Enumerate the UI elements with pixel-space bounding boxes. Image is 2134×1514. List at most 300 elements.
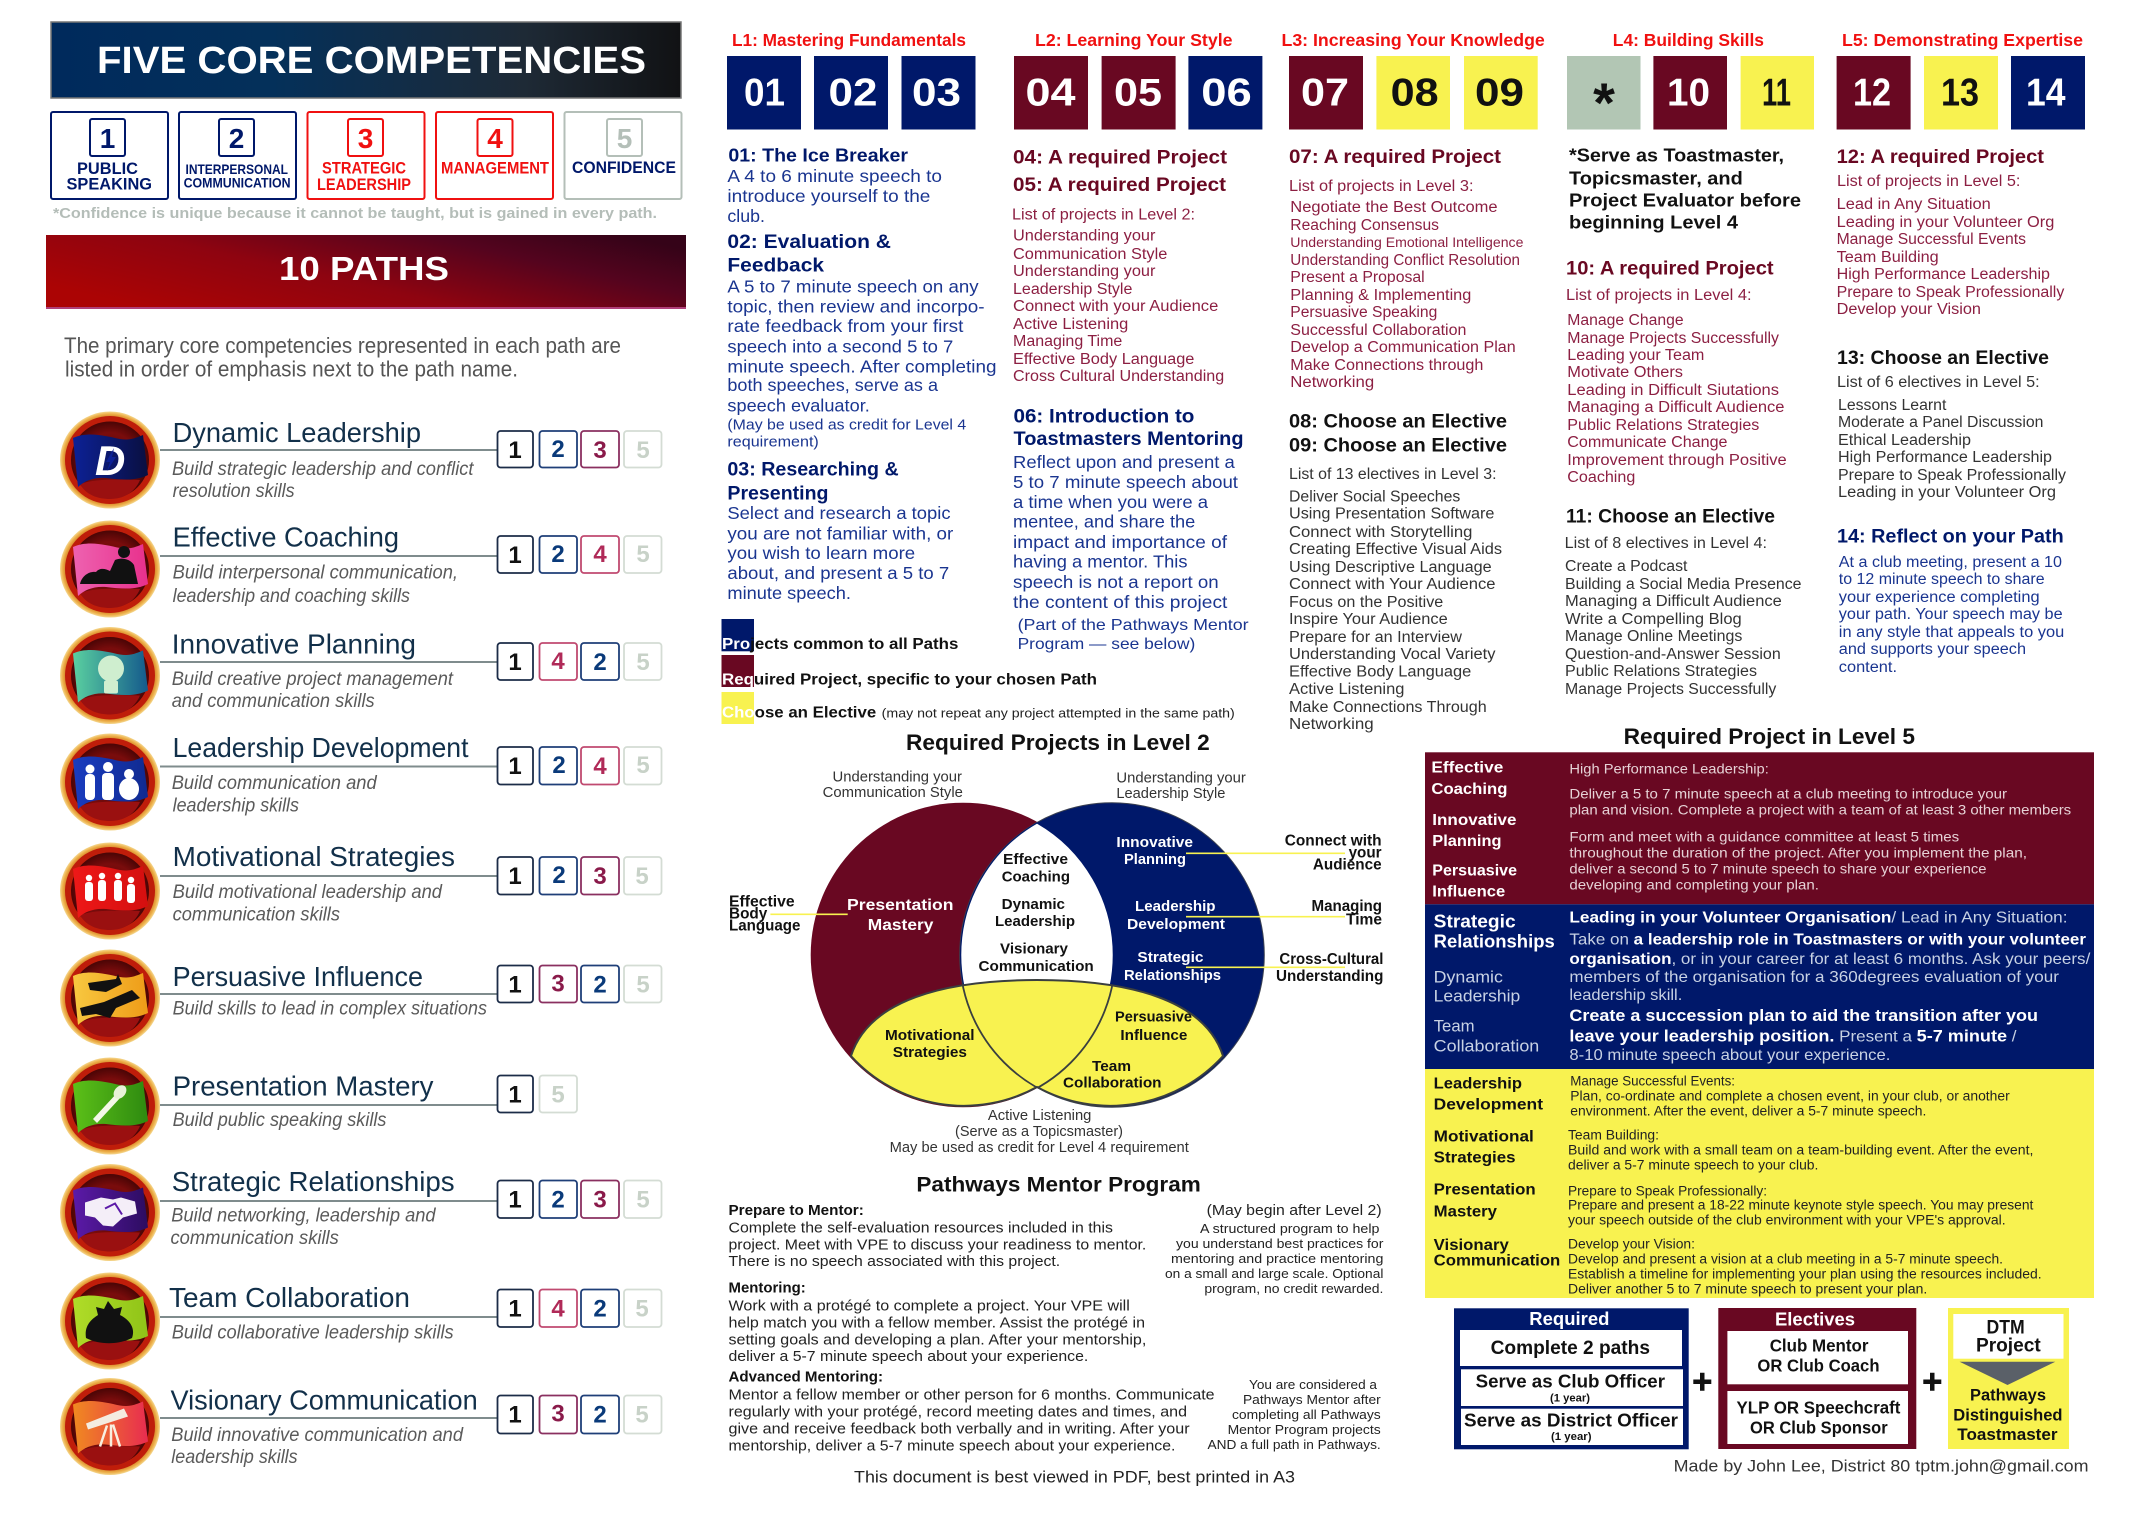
competency badges 1 5: 5 bbox=[551, 1082, 565, 1108]
maroon band: plan and vision. Complete a project with a team of at least 3 other members bbox=[1569, 801, 2071, 817]
venn captions: Active Listening bbox=[988, 1108, 1091, 1124]
text column: level 5 projects: Prepare to Speak Professionally bbox=[1837, 284, 2065, 301]
project number tiles: * bbox=[1593, 71, 1615, 134]
competency badges 1 2 3 5: 1 bbox=[508, 863, 522, 890]
path: Visionary Communication: Build innovative communication and bbox=[171, 1424, 464, 1446]
mentor note: considered a pathways mentor: completing all Pathways bbox=[1232, 1407, 1381, 1422]
arrow bbox=[1960, 1362, 2055, 1385]
text column: level 3 projects: Present a Proposal bbox=[1290, 269, 1425, 286]
card 4 management: MANAGEMENT bbox=[441, 158, 550, 178]
text column: level 2 projects: Connect with your Audience bbox=[1013, 298, 1218, 315]
venn labels: Understanding bbox=[1276, 968, 1383, 985]
competency badges 1 2 3 5: 1 bbox=[508, 1186, 522, 1214]
yellow band: Motivational bbox=[1434, 1129, 1534, 1146]
text column: level 2 projects: speech is not a report on bbox=[1013, 572, 1219, 592]
text column: level 5 projects: At a club meeting, present a 10 bbox=[1839, 554, 2062, 571]
mentor note: considered a pathways mentor: You are considered a bbox=[1249, 1377, 1378, 1392]
icon: dynamic leadership medal: D bbox=[95, 437, 125, 484]
path: Motivational Strategies bbox=[60, 841, 662, 940]
text column: level 4 projects: Coaching bbox=[1567, 469, 1635, 486]
text column: level 3 projects: Make Connections through bbox=[1290, 357, 1483, 374]
navy band: Leadership bbox=[1434, 986, 1520, 1005]
path: Team Collaboration bbox=[60, 1272, 662, 1370]
path: Visionary Communication: leadership skills bbox=[171, 1446, 298, 1468]
text column: level 2 projects: List of projects in Level 2: bbox=[1012, 206, 1195, 223]
path: Strategic Relationships: communication skills bbox=[170, 1227, 339, 1249]
mentor note: may begin after level 2: mentoring and practice mentoring bbox=[1171, 1251, 1383, 1266]
text column: level 2 projects: Effective Body Language bbox=[1013, 351, 1194, 368]
text column: level 1 projects bbox=[727, 144, 996, 603]
text column: level 3 projects: Inspire Your Audience bbox=[1289, 611, 1448, 628]
path: Innovative Planning: Innovative Planning bbox=[172, 629, 416, 660]
mentor note: may begin after level 2: you understand best practices for bbox=[1176, 1236, 1384, 1251]
text column: level 5 projects: Leading in your Volunteer Org bbox=[1837, 214, 2054, 231]
box: electives: YLP OR Speechcraft bbox=[1736, 1397, 1901, 1417]
maroon band: developing and completing your plan. bbox=[1569, 876, 1819, 892]
text column: level 1 projects: about, and present a 5 to 7 bbox=[727, 563, 949, 583]
text column: level 2 projects bbox=[1012, 147, 1249, 653]
venn labels: Relationships bbox=[1124, 967, 1221, 984]
text column: level 1 projects: Feedback bbox=[727, 254, 824, 276]
text column: level 2 projects: Managing Time bbox=[1013, 333, 1122, 350]
project number tiles: 06 bbox=[1201, 72, 1252, 114]
text column: level 2 projects: Program — see below) bbox=[1018, 636, 1195, 653]
box: DTM project bbox=[1948, 1308, 2069, 1449]
title banner: five core competencies bbox=[51, 22, 681, 98]
card 2 interpersonal communication: COMMUNICATION bbox=[184, 174, 291, 190]
text column: level 3 projects: Understanding Conflict Resolution bbox=[1290, 252, 1520, 269]
competency badges 1 2 4 5: 2 bbox=[552, 752, 566, 779]
venn labels: Visionary bbox=[1000, 940, 1069, 957]
competency badges 1 3 2 5: 2 bbox=[593, 1402, 607, 1428]
mentor note: may begin after level 2: on a small and large scale. Optional bbox=[1165, 1266, 1384, 1281]
competency badges 1 2 4 5: 5 bbox=[636, 541, 650, 568]
navy band: members of the organisation for a 360degrees evaluation of your bbox=[1569, 969, 2060, 986]
text column: level 4 projects: Manage Projects Successfully bbox=[1567, 330, 1779, 347]
venn labels: Strategic bbox=[1137, 949, 1204, 966]
navy band: Collaboration bbox=[1434, 1036, 1539, 1055]
competency badges 1 3 2 5: 1 bbox=[508, 972, 522, 998]
box: electives: Electives bbox=[1775, 1310, 1855, 1330]
box: required: (1 year) bbox=[1551, 1431, 1592, 1443]
text column: level 3 projects: List of projects in Level 3: bbox=[1289, 178, 1474, 195]
text column: level 1 projects: (May be used as credit for Level 4 bbox=[727, 417, 966, 433]
box: required: (1 year) bbox=[1550, 1393, 1590, 1405]
text column: level 5 projects: 13: Choose an Elective bbox=[1837, 348, 2049, 369]
text column: level 2 projects: Cross Cultural Understanding bbox=[1013, 368, 1224, 385]
venn labels: Motivational bbox=[885, 1027, 974, 1044]
text column: level 5 projects bbox=[1837, 147, 2066, 676]
competency badges 1 2 3 5 bbox=[498, 857, 662, 894]
venn labels: Innovative bbox=[1116, 834, 1193, 851]
project number tiles: 09 bbox=[1475, 72, 1524, 114]
icon: leadership development medal bbox=[60, 734, 160, 830]
prepare to mentor: There is no speech associated with this project. bbox=[728, 1253, 1060, 1270]
competency badges 1 3 2 5: 3 bbox=[551, 970, 565, 998]
prepare to mentor: Complete the self-evaluation resources included in this bbox=[728, 1219, 1113, 1236]
viewing note: This document is best viewed in PDF, best printed in A3 bbox=[854, 1468, 1295, 1487]
path: Persuasive Influence bbox=[60, 950, 662, 1046]
text column: level 1 projects: speech into a second 5 to 7 bbox=[727, 336, 953, 356]
navy band: leave your leadership position. Present a 5-7 minute / bbox=[1569, 1027, 2017, 1046]
text column: level 5 projects: Leading in your Volunteer Org bbox=[1838, 484, 2056, 501]
mentor note: may begin after level 2: A structured program to help bbox=[1200, 1221, 1379, 1236]
maroon band bbox=[1425, 752, 2094, 904]
connector lines bbox=[770, 853, 1345, 967]
text column: level 4 projects: Create a Podcast bbox=[1565, 558, 1688, 575]
yellow band: Team Building: bbox=[1568, 1127, 1659, 1142]
text column: level 5 projects: Lead in Any Situation bbox=[1837, 196, 1991, 213]
text column: level 4 projects: Project Evaluator before bbox=[1569, 190, 1801, 211]
text column: level 5 projects: Ethical Leadership bbox=[1838, 432, 1971, 449]
competency badges 1 2 3 5 bbox=[498, 1180, 662, 1218]
icon: effective coaching medal bbox=[60, 520, 160, 618]
mentoring: deliver a 5-7 minute speech about your experience. bbox=[728, 1348, 1088, 1365]
box: required: Complete 2 paths bbox=[1491, 1338, 1650, 1359]
competency badges 1 3 2 5: 3 bbox=[551, 1400, 565, 1428]
heading: Required Projects in Level 2 bbox=[906, 730, 1210, 755]
competency badges 1 2 3 5: 2 bbox=[551, 436, 565, 463]
competency badges 1 4 2 5: 4 bbox=[551, 1296, 565, 1322]
path: Effective Coaching: Build interpersonal communication, bbox=[173, 562, 458, 584]
competency badges 1 5: 1 bbox=[508, 1082, 522, 1108]
text column: level 3 projects: Effective Body Language bbox=[1289, 664, 1471, 681]
competency badges 1 2 3 5: 5 bbox=[635, 863, 649, 890]
competency badges 1 3 2 5: 1 bbox=[508, 1402, 522, 1428]
text column: level 4 projects: Managing a Difficult Audience bbox=[1565, 593, 1782, 610]
competency badges 1 4 2 5: 5 bbox=[635, 1296, 649, 1322]
maroon band: Influence bbox=[1432, 884, 1505, 901]
text column: level 5 projects: your path. Your speech may be bbox=[1839, 606, 2063, 623]
text column: level 1 projects: minute speech. After completing bbox=[727, 356, 996, 376]
competency badges 1 2 4 5: 1 bbox=[508, 542, 522, 569]
text column: level 5 projects: List of projects in Level 5: bbox=[1837, 173, 2020, 190]
venn labels: Dynamic bbox=[1002, 896, 1065, 913]
path: Effective Coaching: leadership and coaching skills bbox=[173, 585, 410, 607]
venn captions: May be used as credit for Level 4 requirement bbox=[890, 1140, 1189, 1156]
colour legend: Choose an Elective bbox=[722, 704, 876, 721]
text column: level 4 projects: Building a Social Media Presence bbox=[1565, 576, 1802, 593]
navy band: Leading in your Volunteer Organisation / Lead in Any Situation: bbox=[1569, 910, 2068, 927]
path: Effective Coaching: Effective Coaching bbox=[173, 521, 399, 552]
navy band bbox=[1425, 904, 2094, 1069]
text column: level 3 projects: Deliver Social Speeches bbox=[1289, 489, 1461, 506]
path: Strategic Relationships: Build networking, leadership and bbox=[171, 1205, 437, 1227]
box: electives: Club Mentor bbox=[1770, 1336, 1869, 1356]
project number tiles bbox=[727, 56, 2085, 134]
mentor note: considered a pathways mentor: Pathways Mentor after bbox=[1243, 1392, 1381, 1407]
icon: persuasive influence medal bbox=[60, 950, 160, 1046]
card 5 confidence: CONFIDENCE bbox=[572, 158, 676, 177]
text column: level 2 projects: Reflect upon and present a bbox=[1013, 452, 1235, 472]
text column: level 2 projects: 04: A required Project bbox=[1013, 147, 1228, 168]
project number tiles: 08 bbox=[1391, 72, 1439, 114]
maroon band: Coaching bbox=[1431, 781, 1507, 798]
project number tiles: 12 bbox=[1853, 72, 1891, 114]
path: Dynamic Leadership bbox=[60, 412, 662, 508]
panel: required projects in level 2 venn bbox=[729, 730, 1383, 1156]
competency badges 1 2 4 5: 2 bbox=[551, 541, 565, 568]
mentoring bbox=[728, 1280, 1146, 1365]
project number tiles: 14 bbox=[2026, 72, 2066, 114]
text column: level 3 projects: Networking bbox=[1290, 374, 1374, 391]
text column: level 3 projects: 08: Choose an Elective bbox=[1289, 412, 1507, 433]
competency badges 1 4 2 5: 1 bbox=[508, 649, 522, 676]
text column: level 3 projects bbox=[1289, 147, 1523, 733]
text column: level 4 projects: Manage Online Meetings bbox=[1565, 628, 1743, 645]
text column: level 4 projects: Managing a Difficult Audience bbox=[1567, 399, 1784, 416]
venn labels: Influence bbox=[1120, 1027, 1187, 1044]
text column: level 1 projects: you wish to learn more bbox=[727, 543, 915, 563]
card 1 public speaking: PUBLIC bbox=[77, 159, 138, 178]
text column: level 4 projects: Public Relations Strategies bbox=[1567, 417, 1760, 434]
text column: level 3 projects: Understanding Vocal Variety bbox=[1289, 646, 1496, 663]
paths intro text: listed in order of emphasis next to the path name. bbox=[65, 356, 518, 382]
yellow band: Leadership bbox=[1434, 1075, 1522, 1092]
colour legend: (may not repeat any project attempted in the same path) bbox=[882, 706, 1235, 720]
banner: 10 paths bbox=[46, 235, 686, 309]
text column: level 1 projects: A 4 to 6 minute speech to bbox=[727, 166, 942, 186]
venn labels: Planning bbox=[1124, 851, 1186, 868]
navy band: organisation , or in your career for at least 6 months. Ask your peers/ bbox=[1569, 951, 2091, 968]
icon: plus bbox=[1923, 1373, 1941, 1391]
card 2 interpersonal communication bbox=[179, 112, 296, 199]
venn labels: Team bbox=[1092, 1058, 1131, 1075]
panel: required project in level 5 bbox=[1425, 724, 2094, 1298]
mentor note: considered a pathways mentor bbox=[1208, 1377, 1381, 1452]
title banner: five core competencies: FIVE CORE COMPETENCIES bbox=[97, 40, 646, 82]
project number tiles: 03 bbox=[912, 72, 961, 114]
text column: level 4 projects bbox=[1565, 144, 1802, 698]
competency badges 1 2 4 5: 4 bbox=[593, 753, 607, 780]
text column: level 3 projects: Networking bbox=[1289, 716, 1374, 733]
venn labels: Communication bbox=[978, 958, 1094, 975]
venn captions bbox=[823, 770, 1246, 1156]
text column: level 4 projects: 10: A required Project bbox=[1566, 259, 1774, 280]
path: Persuasive Influence: Persuasive Influence bbox=[173, 961, 423, 992]
text column: level 5 projects: in any style that appeals to you bbox=[1839, 624, 2064, 641]
venn captions: Communication Style bbox=[823, 785, 963, 801]
venn labels bbox=[729, 833, 1383, 1092]
text column: level 5 projects: 14: Reflect on your Path bbox=[1837, 527, 2064, 548]
competency badges 1 4 2 5: 2 bbox=[593, 1296, 607, 1322]
competency badges 1 2 3 5: 5 bbox=[636, 1186, 650, 1214]
path: Team Collaboration: Build collaborative leadership skills bbox=[172, 1322, 454, 1344]
maroon band: Form and meet with a guidance committee at least 5 times bbox=[1569, 828, 1959, 844]
icon: presentation mastery medal bbox=[60, 1058, 160, 1154]
text column: level 4 projects: Manage Change bbox=[1567, 312, 1684, 329]
text column: level 3 projects: 07: A required Project bbox=[1289, 147, 1502, 168]
text column: level 3 projects: Prepare for an Interview bbox=[1289, 629, 1463, 646]
box: DTM project: Distinguished bbox=[1953, 1407, 2062, 1425]
competency badges 1 2 4 5: 1 bbox=[508, 753, 522, 780]
venn captions: (Serve as a Topicsmaster) bbox=[955, 1124, 1123, 1140]
navy band: 8-10 minute speech about your experience. bbox=[1569, 1047, 1890, 1064]
text column: level 4 projects: Manage Projects Successfully bbox=[1565, 681, 1777, 698]
yellow band: Establish a timeline for implementing your plan using the resources included. bbox=[1568, 1267, 2042, 1282]
yellow band: deliver a 5-7 minute speech to your club. bbox=[1568, 1157, 1818, 1172]
text column: level 5 projects: Team Building bbox=[1837, 249, 1939, 266]
text column: level 2 projects: Active Listening bbox=[1013, 316, 1128, 333]
text column: level 4 projects: Question-and-Answer Session bbox=[1565, 646, 1781, 663]
venn captions: Understanding your bbox=[832, 770, 962, 786]
competency badges 1 2 3 5: 2 bbox=[552, 862, 566, 889]
text column: level 2 projects: Understanding your bbox=[1013, 263, 1155, 280]
text column: level 2 projects: having a mentor. This bbox=[1013, 552, 1188, 572]
text column: level 4 projects: Leading your Team bbox=[1567, 347, 1704, 364]
path: Visionary Communication bbox=[60, 1378, 662, 1475]
box: required: Serve as District Officer bbox=[1464, 1411, 1678, 1431]
colour legend bbox=[722, 619, 1235, 724]
text column: level 3 projects: Using Descriptive Language bbox=[1289, 559, 1492, 576]
competency badges 1 4 2 5 bbox=[498, 1290, 662, 1327]
level headings: L3: Increasing Your Knowledge bbox=[1282, 30, 1545, 50]
venn labels: Collaboration bbox=[1063, 1075, 1162, 1092]
venn labels: Body bbox=[729, 906, 768, 923]
project number tiles: 02 bbox=[828, 72, 878, 114]
competency badges 1 2 3 5 bbox=[498, 431, 662, 468]
venn labels: Coaching bbox=[1002, 868, 1070, 885]
box: electives: OR Club Sponsor bbox=[1750, 1417, 1888, 1437]
text column: level 3 projects: Successful Collaboration bbox=[1290, 322, 1466, 339]
competency badges 1 3 2 5: 5 bbox=[635, 1402, 649, 1428]
card 1 public speaking: SPEAKING bbox=[66, 174, 152, 194]
competency badges 1 2 3 5: 3 bbox=[593, 863, 607, 890]
path: Presentation Mastery: Presentation Mastery bbox=[173, 1071, 434, 1102]
navy band: leadership skill. bbox=[1569, 987, 1682, 1004]
yellow band: Develop and present a vision at a club meeting in a 5-7 minute speech. bbox=[1568, 1252, 2003, 1267]
competency badges 1 4 2 5: 4 bbox=[551, 648, 565, 675]
text column: level 5 projects: your experience completing bbox=[1839, 589, 2040, 606]
text column: level 3 projects: Negotiate the Best Outcome bbox=[1290, 199, 1498, 216]
mentoring: help match you with a fellow member. Assist the protégé in bbox=[728, 1314, 1145, 1331]
card 5 confidence: 5 bbox=[617, 123, 632, 154]
path: Leadership Development: Leadership Development bbox=[173, 732, 469, 763]
prepare to mentor bbox=[728, 1202, 1146, 1270]
panel: DTM requirements bbox=[1454, 1308, 2069, 1449]
text column: level 1 projects: minute speech. bbox=[727, 583, 851, 603]
venn chart bbox=[729, 803, 1383, 1107]
path: Presentation Mastery bbox=[60, 1058, 577, 1154]
venn labels: Persuasive bbox=[1115, 1009, 1192, 1026]
mentor note: considered a pathways mentor: Mentor Program projects bbox=[1228, 1422, 1381, 1437]
venn labels: Development bbox=[1127, 916, 1225, 933]
level headings: L1: Mastering Fundamentals bbox=[732, 30, 966, 50]
path: Leadership Development bbox=[60, 732, 662, 830]
author credit: Made by John Lee, District 80 tptm.john@gmail.com bbox=[1674, 1457, 2088, 1476]
confidence footnote: *Confidence is unique because it cannot be taught, but is gained in every path. bbox=[53, 206, 657, 222]
card 5 confidence bbox=[564, 112, 682, 199]
text column: level 5 projects: Moderate a Panel Discussion bbox=[1838, 414, 2043, 431]
competency badges 1 3 2 5 bbox=[498, 1396, 662, 1434]
project number tiles: 11 bbox=[1762, 72, 1791, 114]
path: Persuasive Influence: Build skills to lead in complex situations bbox=[173, 998, 487, 1020]
icon: strategic relationships medal bbox=[60, 1164, 160, 1261]
path: Leadership Development: Build communication and bbox=[172, 772, 378, 794]
icon: team collaboration medal bbox=[60, 1272, 160, 1370]
card 1 public speaking: 1 bbox=[100, 123, 115, 154]
heading: Pathways Mentor Program bbox=[916, 1174, 1201, 1197]
box: DTM project: Pathways bbox=[1970, 1387, 2046, 1405]
text column: level 5 projects: Lessons Learnt bbox=[1838, 397, 1947, 414]
project number tiles: 10 bbox=[1667, 72, 1710, 114]
venn labels: your bbox=[1349, 845, 1382, 862]
venn labels: Effective bbox=[729, 894, 795, 911]
path: Motivational Strategies: communication skills bbox=[173, 904, 340, 926]
mentoring: Mentoring: bbox=[728, 1280, 806, 1297]
maroon band: deliver a second 5 to 7 minute speech to share your experience bbox=[1569, 860, 1987, 876]
competency badges 1 2 3 5: 3 bbox=[593, 437, 607, 464]
project number tiles: 05 bbox=[1114, 72, 1162, 114]
competency badges 1 2 4 5: 5 bbox=[636, 752, 650, 779]
yellow band: your speech outside of the club environment with your VPE's approval. bbox=[1568, 1213, 2006, 1228]
competency badges 1 2 4 5 bbox=[498, 747, 662, 784]
text column: level 1 projects: you are not familiar with, or bbox=[727, 523, 953, 543]
text column: level 2 projects: Understanding your bbox=[1013, 228, 1155, 245]
text column: level 2 projects: Communication Style bbox=[1013, 246, 1167, 263]
text column: level 2 projects: (Part of the Pathways Mentor bbox=[1018, 617, 1249, 634]
text column: level 3 projects: Persuasive Speaking bbox=[1290, 304, 1437, 321]
text column: level 3 projects: Connect with Your Audience bbox=[1289, 576, 1496, 593]
competency badges 1 5 bbox=[498, 1076, 577, 1112]
text column: level 4 projects: Improvement through Positive bbox=[1567, 452, 1787, 469]
path: Effective Coaching bbox=[60, 520, 662, 618]
path: Motivational Strategies: Build motivational leadership and bbox=[173, 881, 443, 903]
icon: motivational strategies medal bbox=[60, 842, 160, 940]
card 3 strategic leadership bbox=[308, 112, 424, 199]
icon: dynamic leadership medal bbox=[60, 412, 160, 508]
text column: level 4 projects: Communicate Change bbox=[1567, 434, 1728, 451]
level headings: L4: Building Skills bbox=[1613, 30, 1764, 50]
navy band: Create a succession plan to aid the transition after you bbox=[1569, 1006, 2038, 1025]
text column: level 3 projects: List of 13 electives in Level 3: bbox=[1289, 466, 1496, 483]
path: Innovative Planning bbox=[60, 627, 662, 724]
text column: level 5 projects: content. bbox=[1839, 659, 1897, 676]
level headings: L2: Learning Your Style bbox=[1035, 30, 1233, 50]
prepare to mentor: project. Meet with VPE to discuss your readiness to mentor. bbox=[728, 1236, 1146, 1253]
icon: plus bbox=[1693, 1373, 1711, 1391]
competency badges 1 2 3 5: 1 bbox=[508, 437, 522, 464]
panel: competency cards bbox=[51, 112, 682, 199]
text column: level 1 projects: A 5 to 7 minute speech on any bbox=[727, 277, 979, 297]
text column: level 1 projects: requirement) bbox=[727, 434, 819, 450]
text column: level 5 projects: Prepare to Speak Professionally bbox=[1838, 467, 2066, 484]
yellow band: Develop your Vision: bbox=[1568, 1237, 1695, 1252]
maroon band: Planning bbox=[1432, 833, 1502, 850]
box: required bbox=[1454, 1308, 1689, 1449]
competency badges 1 2 4 5 bbox=[498, 536, 662, 573]
maroon band: Deliver a 5 to 7 minute speech at a club meeting to introduce your bbox=[1569, 785, 2007, 801]
maroon band: Effective bbox=[1431, 760, 1503, 777]
competency badges 1 2 3 5: 3 bbox=[593, 1186, 607, 1214]
text column: level 5 projects: List of 6 electives in Level 5: bbox=[1837, 374, 2040, 391]
mentoring: setting goals and developing a plan. After your mentorship, bbox=[728, 1331, 1146, 1348]
text column: level 4 projects: Topicsmaster, and bbox=[1569, 168, 1743, 188]
text column: level 3 projects: Reaching Consensus bbox=[1290, 217, 1439, 234]
competency badges 1 4 2 5: 1 bbox=[508, 1296, 522, 1322]
level headings bbox=[732, 30, 2083, 50]
text column: level 1 projects: 02: Evaluation & bbox=[727, 231, 891, 253]
card 4 management bbox=[436, 112, 553, 199]
navy band: Team bbox=[1434, 1016, 1475, 1035]
maroon band: High Performance Leadership: bbox=[1569, 760, 1769, 776]
text column: level 2 projects: Leadership Style bbox=[1013, 281, 1132, 298]
box: electives bbox=[1718, 1308, 1916, 1449]
yellow band: Strategies bbox=[1434, 1150, 1516, 1167]
text column: level 1 projects: 03: Researching & bbox=[727, 459, 899, 481]
navy band: Relationships bbox=[1434, 932, 1555, 952]
yellow band: Visionary bbox=[1434, 1237, 1509, 1254]
